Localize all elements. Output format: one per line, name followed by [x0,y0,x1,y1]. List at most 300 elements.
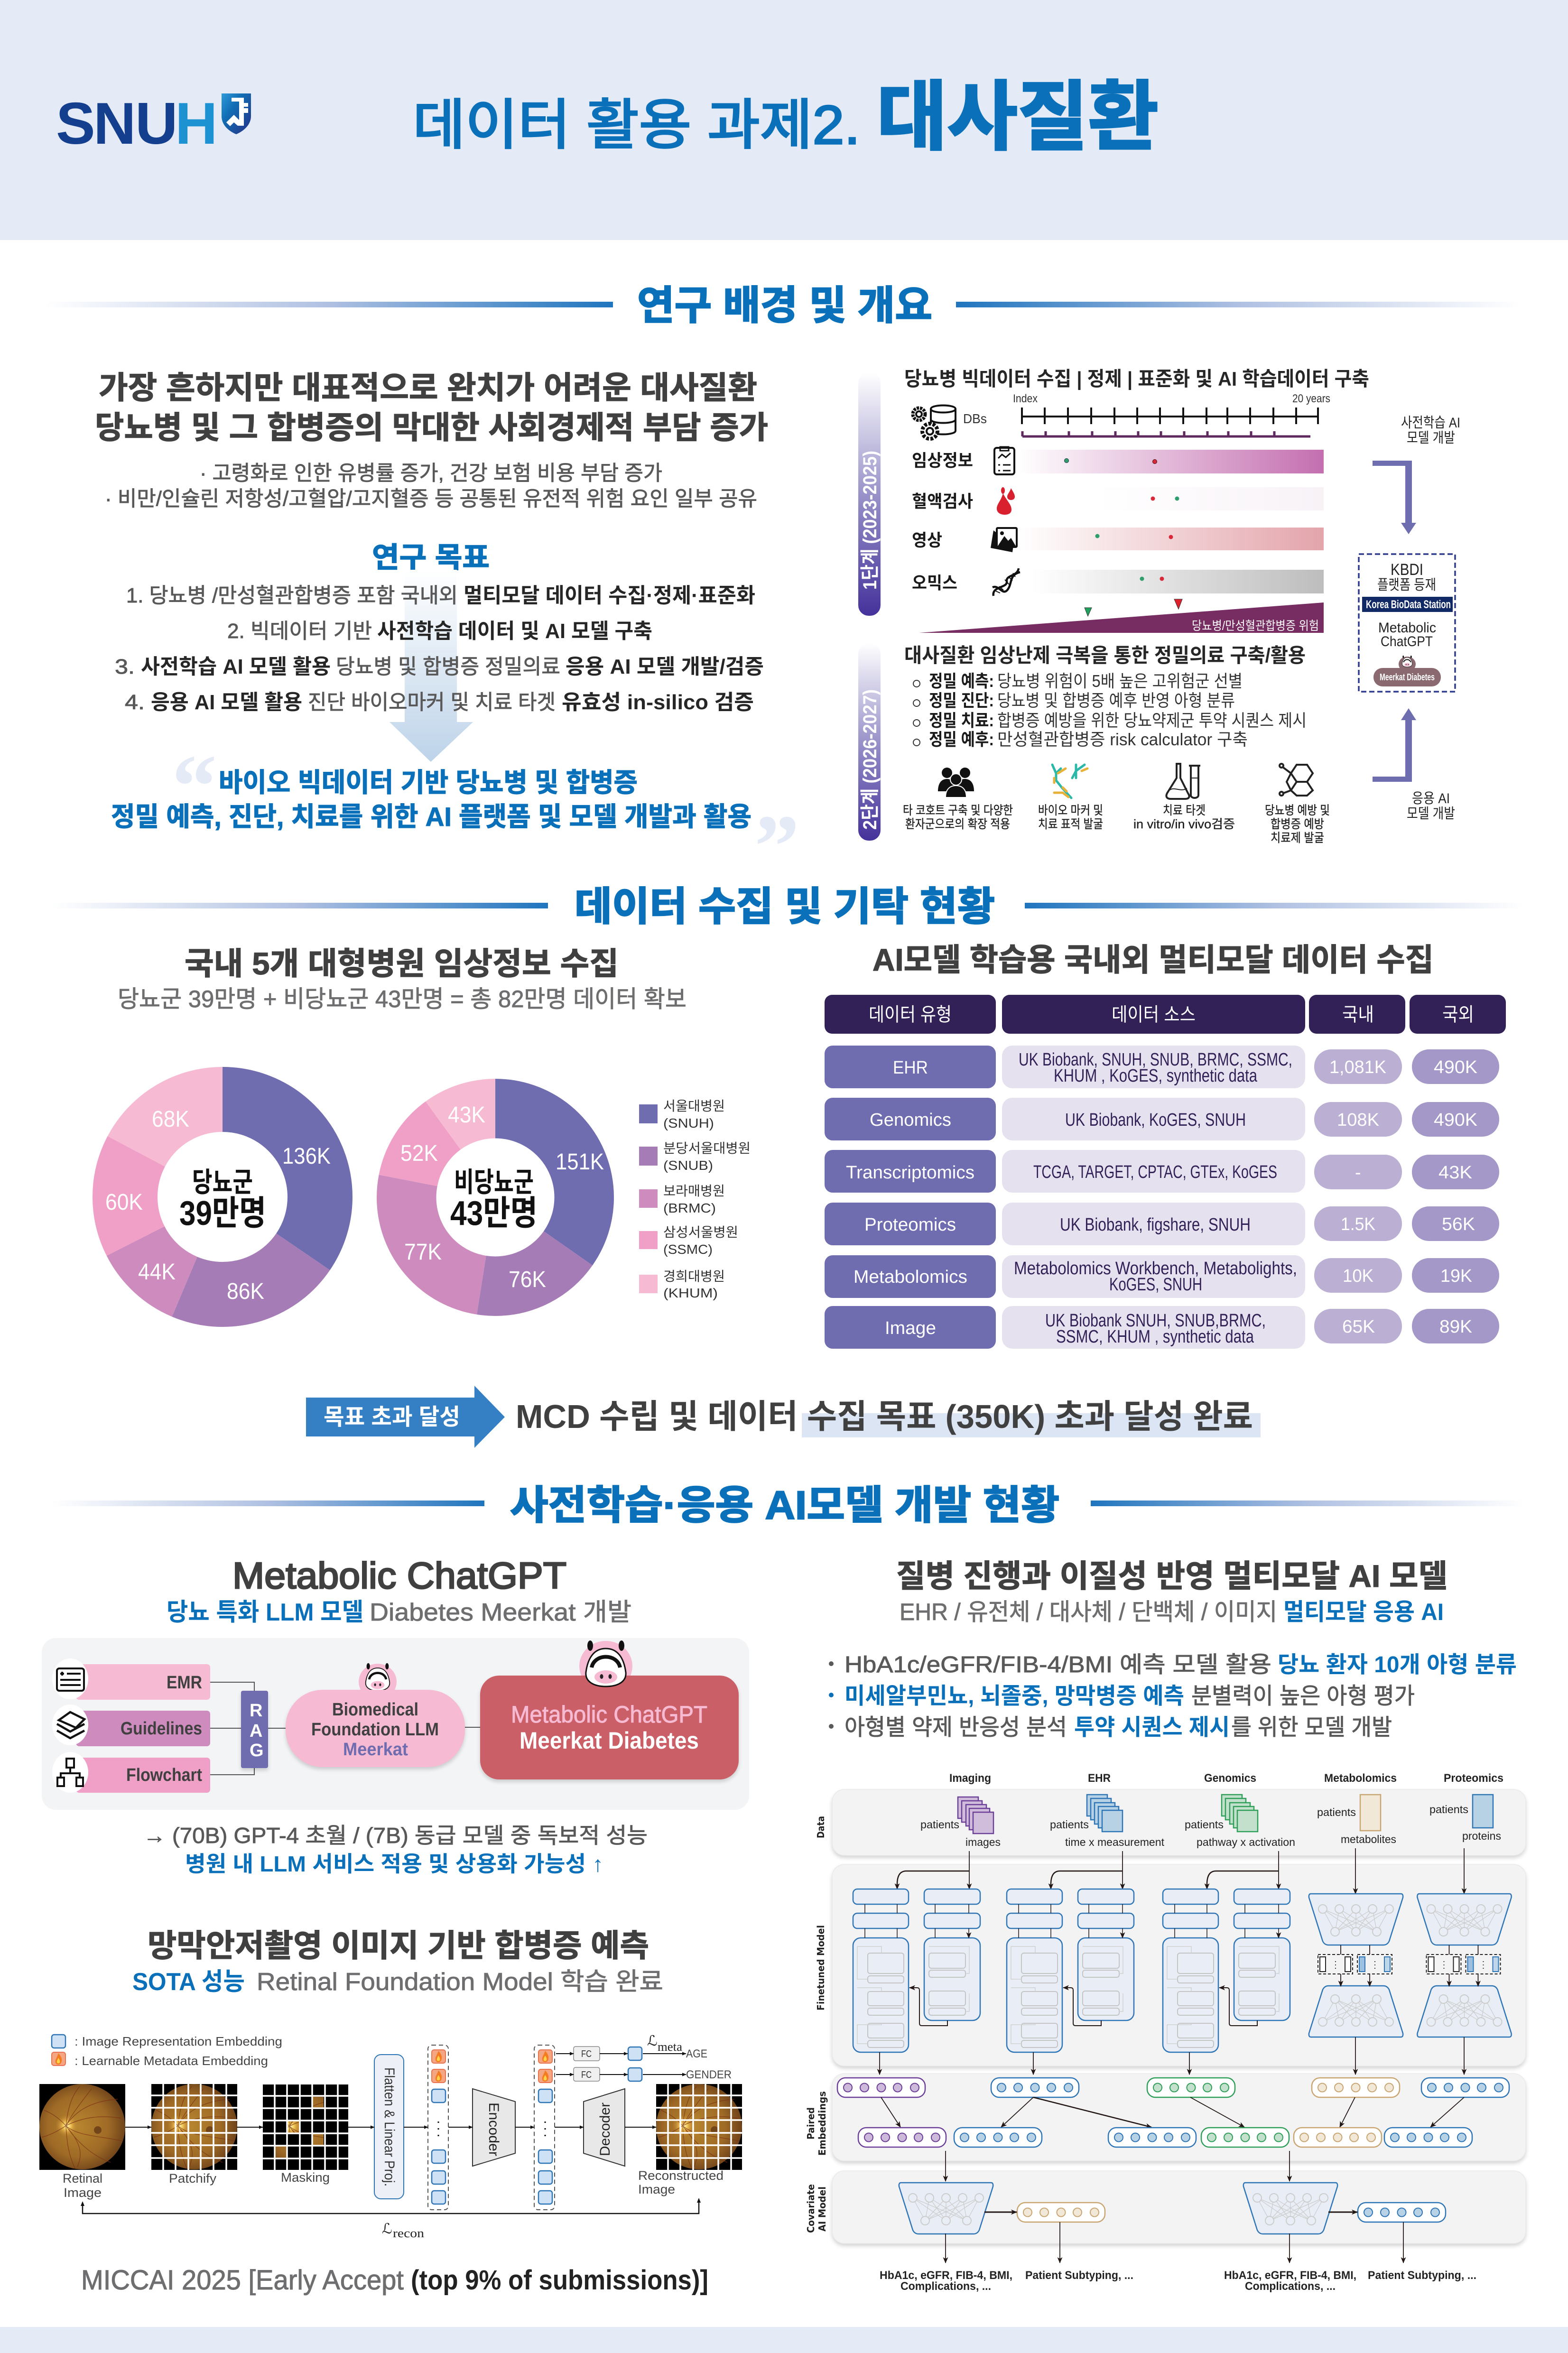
text block: precision medicine list: 만성혈관합병증 risk calculator 구축 [997,730,1248,749]
row: Image: UK Biobank SNUH, SNUB,BRMC, [1045,1311,1266,1331]
text block: precision medicine list: 정밀 예후: [929,730,994,749]
heading: burden [95,370,768,445]
row: Flowchart [52,1752,210,1793]
image: reconstructed: Reconstructed [638,2168,724,2183]
legend: (BRMC) [663,1201,716,1215]
row: Transcriptomics: Transcriptomics [846,1163,974,1183]
chart: non-diabetic donut: 비당뇨군 [454,1167,534,1198]
text block: MICCAI [81,2265,708,2296]
arrow: down to KBDI [1373,461,1416,534]
text block: goals: 응용 AI 모델 활용 [151,691,302,714]
text block: precision medicine list: 정밀 진단: [929,691,994,710]
text block: bullets [829,1652,1517,1740]
logo: SNUH: S [56,91,95,157]
metadata heads: GENDER [686,2068,732,2081]
text block: bullets: 투약 시퀀스 제시 [1074,1715,1230,1740]
table header [825,995,1506,1034]
text block: goals: 멀티모달 데이터 수집·정제·표준화 [464,584,755,607]
captions: 당뇨병 예방 및 [1265,803,1330,817]
chart: diabetic donut: 60K [105,1190,143,1215]
heading: 망막안저촬영 이미지 기반 합병증 예측 [148,1928,649,1963]
row: Proteomics: UK Biobank, figshare, SNUH [1060,1215,1251,1235]
text block: bullets: 당뇨 환자 10개 아형 분류 [1278,1652,1517,1677]
side labels: AI Model [816,2186,828,2232]
heading: research goal: 연구 목표 [372,542,490,574]
text block: goals: 사전학습 AI 모델 활용 [141,655,331,678]
image: retinal [39,2084,125,2200]
side labels: Finetuned Model [815,1925,826,2010]
image: patchify: Patchify [169,2171,217,2186]
decoder: Decoder [597,2103,613,2156]
phase bar 1: 1단계 (2023-2025) [860,451,881,590]
panel: background text [95,370,799,897]
side labels: Embeddings [816,2091,828,2156]
logo: SNUH: H [175,91,218,157]
row: Guidelines: Guidelines [121,1719,202,1739]
box: flatten [374,2055,404,2199]
legend: 경희대병원 [663,1269,725,1284]
box: Biomedical Foundation LLM: Meerkat [343,1740,408,1760]
heading: step 1: 당뇨병 빅데이터 수집 | 정제 | 표준화 및 AI 학습데이터 구축 [904,368,1369,390]
box: Metabolic ChatGPT Meerkat Diabetes [480,1676,739,1779]
subtitle: 당뇨군 39만명 + 비당뇨군 43만명 = 총 82만명 데이터 확보 [118,986,687,1012]
timeline [1013,392,1330,436]
box: RAG [241,1691,268,1768]
text block: MICCAI: (top 9% of submissions)] [411,2265,708,2296]
text block: goals: 당뇨병 및 합병증 정밀의료 [336,655,560,678]
chart: diabetic donut [105,1100,331,1304]
heading: 질병 진행과 이질성 반영 멀티모달 AI 모델 [896,1558,1447,1593]
encoder [473,2089,515,2166]
arrow: goal exceeded [306,1386,505,1448]
image: retinal: Retinal [63,2171,102,2186]
subtitle: Diabetes Meerkat 개발 [370,1599,631,1626]
data labels: pathway x activation [1197,1836,1295,1848]
metadata heads: FC [581,2070,592,2080]
row: Image: 89K [1439,1317,1472,1337]
data labels [920,1803,1501,1848]
text block: bullets: 아형별 약제 반응성 분석 [844,1715,1067,1740]
metadata heads [574,2033,732,2081]
row: imaging: 영상 [912,530,942,550]
subtitle: 당뇨 특화 LLM 모델 [167,1599,363,1626]
text block: goals: 진단 바이오마커 및 치료 타겟 [308,691,556,714]
callout: goal statement: 정밀 예측, 진단, 치료를 위한 AI 플랫폼 및 모델 개발과 활용 [111,802,752,832]
panel: roadmap [858,368,1460,845]
row: Genomics: 490K [1434,1110,1477,1130]
text block: performance: 병원 내 LLM 서비스 적용 및 상용화 가능성 ↑ [185,1852,603,1876]
text block: performance: → (70B) GPT-4 초월 / (7B) 동급 모델 중 독보적 성능 [143,1823,648,1848]
row: Metabolomics: KoGES, SNUH [1109,1275,1202,1295]
section heading: 연구 배경 및 개요: 연구 배경 및 개요 [637,283,932,328]
text block: bullets: · 비만/인슐린 저항성/고혈압/고지혈증 등 공통된 유전적 위험 요인 일부 공유 [105,487,757,510]
side labels: Data [815,1816,826,1838]
panel: multimodal AI model [805,1558,1526,2293]
quote marks: ” [754,797,799,897]
column headers: Genomics [1204,1772,1256,1785]
panel: KBDI box: 플랫폼 등재 [1377,577,1436,593]
captions: in vitro/in vivo검증 [1133,817,1235,831]
chart: non-diabetic donut: 43K [448,1102,485,1128]
chart: non-diabetic donut: 52K [400,1141,438,1166]
panel: multimodal data table [825,942,1506,1349]
row: Proteomics: Proteomics [864,1215,956,1235]
text block: goals: 사전학습 데이터 및 AI 모델 구축 [377,620,652,643]
row: Image: Image [885,1318,936,1338]
phase bar 2: 2단계 (2026-2027) [860,689,881,830]
data labels: patients [1185,1818,1224,1831]
captions: 합병증 예방 [1271,817,1324,831]
row: Transcriptomics: 43K [1438,1163,1472,1183]
title: 대사질환 [877,74,1159,159]
chart: diabetic donut: 136K [282,1144,331,1169]
legend: : Learnable Metadata Embedding [74,2054,268,2068]
risk wedge: 당뇨병/만성혈관합병증 위험 [1192,619,1319,633]
tokens column B [534,2045,555,2210]
reconstruction loss loop: recon [393,2226,424,2240]
text block: bullets [105,462,757,510]
chart: non-diabetic donut: 151K [556,1149,604,1175]
legend: 분당서울대병원 [663,1141,751,1156]
chart: non-diabetic donut: 76K [509,1267,546,1292]
side labels [805,1816,828,2233]
data to model arrows [897,1848,1464,1894]
panel: KBDI box: Meerkat Diabetes [1380,672,1435,683]
section heading: 데이터 수집 및 기탁 현황 [52,884,1523,929]
row: Metabolomics: Metabolomics Workbench, Metabolights, [1014,1259,1297,1278]
row: EHR: 1,081K [1329,1057,1386,1077]
row: Proteomics: 1.5K [1341,1214,1375,1234]
phase bar 1 [858,372,881,616]
captions: 바이오 마커 및 [1038,803,1103,817]
legend: (SSMC) [663,1242,713,1257]
row: Transcriptomics: TCGA, TARGET, CPTAC, GTEx, KoGES [1033,1162,1277,1182]
row: EMR [52,1658,210,1700]
captions: 환자군으로의 확장 적용 [905,817,1010,831]
chart: diabetic donut: 39만명 [179,1195,266,1232]
embeddings top row [837,2078,1509,2097]
diagram background [42,1638,749,1810]
subtitle: SOTA 성능 [132,1968,245,1996]
outcome labels: Complications, ... [900,2280,991,2293]
logo: SNUH: U [135,91,178,157]
text block: bullets: 를 위한 모델 개발 [1231,1715,1392,1740]
outcome labels [880,2269,1476,2293]
label: DBs: DBs [963,411,987,426]
label: pretrain model: 모델 개발 [1407,430,1455,446]
row: blood test [912,487,1324,515]
captions: 타 코호트 구축 및 다양한 [903,803,1013,817]
covariate models [899,2151,1446,2263]
legend: (SNUB) [663,1158,713,1173]
encoder: Encoder [486,2103,501,2156]
chart: diabetic donut: 44K [138,1260,176,1285]
legend: 삼성서울병원 [663,1225,738,1240]
row: Proteomics [825,1203,1499,1245]
image: masking [263,2084,349,2185]
table header: 국내 [1342,1004,1374,1025]
label: pretrain model: 사전학습 AI [1401,415,1460,431]
row: Metabolomics [825,1255,1499,1298]
heading: step 2: 대사질환 임상난제 극복을 통한 정밀의료 구축/활용 [904,644,1306,667]
text block: goals [115,584,764,714]
icon: flasks [1166,764,1200,799]
callout: goal statement [111,768,752,832]
legend: 서울대병원 [663,1099,725,1113]
proteomics autoencoder [1417,1894,1512,2037]
box: Metabolic ChatGPT Meerkat Diabetes: Metabolic ChatGPT [511,1701,707,1728]
image: reconstructed [638,2084,742,2196]
text block: bullets: HbA1c/eGFR/FIB-4/BMI 예측 모델 활용 [844,1652,1271,1677]
arrow: down gradient [390,570,473,762]
metadata heads: meta [658,2040,682,2054]
text block: precision medicine list [913,671,1307,749]
column headers: EHR [1088,1772,1111,1785]
row: omics [912,568,1324,596]
timeline: 20 years [1292,392,1330,405]
text block: precision medicine list: 정밀 치료: [929,711,994,730]
panel: Metabolic ChatGPT [42,1555,749,1876]
icon: large meerkat [586,1640,626,1686]
text block: goals: 2. 빅데이터 기반 [227,620,372,643]
column headers [949,1772,1503,1785]
row: Guidelines [52,1705,210,1746]
label: applied model [1407,791,1455,822]
outcome labels: Patient Subtyping, ... [1368,2269,1476,2282]
text block: bullets: 미세알부민뇨, 뇌졸중, 망막병증 예측 [844,1684,1184,1709]
risk wedge [919,599,1324,633]
flow arrows [125,2054,686,2127]
data labels: metabolites [1341,1833,1396,1845]
section heading: 사전학습·응용 AI모델 개발 현황 [52,1483,1523,1528]
legend [639,1099,751,1300]
panel: KBDI box: KBDI [1391,561,1423,579]
row: clinical [912,447,1324,474]
row: clinical: 임상정보 [912,451,973,470]
row: imaging [912,527,1324,552]
box: flatten: Flatten & Linear Proj. [381,2067,397,2186]
captions: 치료 표적 발굴 [1038,817,1103,831]
section heading: 데이터 수집 및 기탁 현황: 데이터 수집 및 기탁 현황 [575,884,995,929]
legend [52,2034,282,2068]
panel: KBDI box [1359,554,1455,692]
text block: goals: 유효성 in-silico 검증 [562,691,754,714]
text block: goals: 4. [125,691,145,714]
outcome labels: Patient Subtyping, ... [1025,2269,1133,2282]
row: Transcriptomics [825,1150,1499,1193]
captions [903,803,1330,845]
legend: (SNUH) [663,1116,714,1130]
row: Image [825,1306,1499,1349]
subtitle: 멀티모달 응용 AI [1283,1599,1444,1625]
subtitle: EHR / 유전체 / 대사체 / 단백체 / 이미지 [900,1599,1277,1625]
data labels: patients [920,1818,959,1831]
chart: non-diabetic donut: 43만명 [450,1195,538,1232]
text block: performance [143,1823,648,1876]
legend: 보라매병원 [663,1184,725,1198]
icon: antibodies [1052,765,1087,798]
chart: non-diabetic donut: 77K [404,1240,442,1265]
heading: Metabolic ChatGPT [232,1555,566,1596]
row: EHR: 490K [1434,1057,1477,1077]
icon: databases with gears [913,405,956,439]
chart: non-diabetic donut [400,1102,604,1292]
outcome labels: Complications, ... [1245,2280,1336,2293]
icon: people [938,768,974,797]
row: Genomics: Genomics [870,1110,951,1130]
embeddings pairing arrows [881,2097,1464,2127]
row: EHR [825,1046,1499,1088]
title: 데이터 활용 과제2. [413,95,860,156]
panel: retinal foundation model [39,1928,742,2296]
model to embedding arrows [880,2037,1464,2075]
icon: small meerkat [359,1663,397,1700]
column headers: Imaging [949,1772,991,1785]
captions: 치료제 발굴 [1271,831,1324,845]
row: Image: 65K [1342,1317,1375,1337]
table header: 국외 [1442,1004,1474,1025]
row: Metabolomics: Metabolomics [854,1267,967,1287]
timeline: Index [1013,392,1038,405]
side labels: Paired [805,2107,816,2140]
title [413,74,1159,159]
data labels: patients [1050,1818,1089,1831]
row: EHR: EHR [893,1058,928,1078]
column headers: Metabolomics [1324,1772,1397,1785]
heading: 국내 5개 대형병원 임상정보 수집 [185,946,619,981]
callout: goal statement: 바이오 빅데이터 기반 당뇨병 및 합병증 [219,768,638,797]
metadata heads: AGE [686,2047,707,2060]
image: retinal: Image [64,2186,102,2200]
text block: goals: 3. [115,655,135,678]
quote marks: “ [172,737,217,836]
data labels: patients [1429,1803,1468,1816]
chart: diabetic donut: 86K [227,1279,264,1304]
row: EHR: UK Biobank, SNUH, SNUB, BRMC, SSMC, [1019,1050,1292,1070]
data labels: proteins [1462,1830,1501,1842]
text block: bullets: 분별력이 높은 아형 평가 [1191,1684,1415,1709]
callout: MCD achievement: MCD 수립 및 데이터 수집 목표 (350K) 초과 달성 완료 [516,1398,1253,1435]
arrow: up to KBDI [1373,708,1416,782]
row: blood test: 혈액검사 [912,491,973,511]
panel backgrounds [832,1789,1526,2243]
label: applied model: 응용 AI [1412,791,1450,806]
panel: KBDI box: Metabolic [1378,620,1436,636]
row: Flowchart: Flowchart [126,1765,202,1785]
decoder [584,2089,625,2166]
table header: 데이터 소스 [1112,1004,1196,1025]
connectors [210,1682,480,1775]
quote marks [172,737,799,897]
header band [0,0,1568,240]
heading: burden: 가장 흔하지만 대표적으로 완치가 어려운 대사질환 [99,370,757,405]
logo: SNUH [56,91,251,157]
captions: 치료 타겟 [1163,803,1206,817]
icon: molecule [1280,764,1313,796]
text block: bullets: · 고령화로 인한 유병률 증가, 건강 보험 비용 부담 증가 [200,462,662,485]
section heading: 연구 배경 및 개요 [45,283,1520,328]
row: Metabolomics: 10K [1343,1266,1373,1286]
box: Biomedical Foundation LLM: Biomedical [332,1700,418,1720]
reconstruction loss loop: ℒ [382,2221,392,2237]
chart: diabetic donut: 68K [152,1107,189,1132]
table header: 데이터 유형 [869,1004,952,1025]
panel: KBDI box: Korea BioData Station [1366,598,1451,611]
legend: (KHUM) [663,1286,718,1300]
embeddings bottom row [858,2128,1472,2147]
row: Metabolomics: 19K [1440,1266,1472,1286]
image: masking: Masking [281,2170,330,2185]
row: Genomics: 108K [1337,1110,1379,1130]
data stacks [958,1795,1493,1834]
row: EHR: KHUM , KoGES, synthetic data [1054,1066,1258,1086]
box: Biomedical Foundation LLM [286,1690,465,1767]
outcome labels: HbA1c, eGFR, FIB-4, BMI, [1224,2269,1356,2282]
logo: SNUH: N [93,91,136,157]
column headers: Proteomics [1444,1772,1503,1785]
footer band [0,2327,1568,2353]
panel: domestic hospitals [105,946,751,1304]
heading: AI모델 학습용 국내외 멀티모달 데이터 수집 [872,942,1434,977]
row: Genomics: UK Biobank, KoGES, SNUH [1065,1110,1246,1130]
box: Metabolic ChatGPT Meerkat Diabetes: Meerkat Diabetes [520,1727,699,1754]
reconstruction loss loop [81,2198,701,2240]
subtitle [167,1599,631,1626]
image: reconstructed: Image [638,2182,675,2196]
text block: precision medicine list: 합병증 예방을 위한 당뇨약제군 투약 시퀀스 제시 [997,711,1307,730]
image: patchify [151,2084,237,2186]
side labels: Covariate [805,2184,816,2233]
arrow: goal exceeded: 목표 초과 달성 [324,1405,460,1430]
finetuned blocks [853,1889,1290,2052]
row: Genomics [825,1098,1499,1140]
subtitle: Retinal Foundation Model 학습 완료 [257,1968,663,1996]
metadata heads: ℒ [647,2033,658,2049]
box: Biomedical Foundation LLM: Foundation LLM [311,1720,439,1740]
row: omics: 오믹스 [912,573,957,593]
data labels: patients [1317,1806,1356,1818]
outcome labels: HbA1c, eGFR, FIB-4, BMI, [880,2269,1012,2282]
text block: precision medicine list: 당뇨병 및 합병증 예후 반영 아형 분류 [997,691,1235,710]
row: Transcriptomics: - [1355,1163,1361,1183]
text block: goals: 응용 AI 모델 개발/검증 [566,655,764,678]
panel: KBDI box: ChatGPT [1381,634,1433,649]
table rows [825,1046,1499,1349]
metadata heads: FC [581,2049,592,2059]
text block: precision medicine list: 당뇨병 위험이 5배 높은 고위험군 선별 [997,671,1243,691]
chart: diabetic donut: 당뇨군 [192,1167,253,1198]
icon: large meerkat ear backing [579,1641,632,1691]
text block: MICCAI: MICCAI 2025 [Early Accept [81,2265,404,2296]
row: Image: SSMC, KHUM , synthetic data [1056,1327,1254,1347]
label: applied model: 모델 개발 [1407,806,1455,822]
box: RAG: G [250,1741,264,1760]
row: Proteomics: 56K [1442,1214,1475,1234]
box: RAG: R [250,1701,262,1721]
tokens column A [428,2045,448,2210]
section heading: 사전학습·응용 AI모델 개발 현황: 사전학습·응용 AI모델 개발 현황 [510,1483,1059,1528]
metabolomics autoencoder [1309,1894,1403,2037]
data labels: time x measurement [1065,1836,1165,1848]
heading: burden: 당뇨병 및 그 합병증의 막대한 사회경제적 부담 증가 [95,410,768,445]
text block: precision medicine list: 정밀 예측: [929,671,994,691]
legend: : Image Representation Embedding [74,2034,282,2048]
box: RAG: A [250,1721,262,1741]
row: EMR: EMR [167,1673,202,1693]
text block: goals: 1. 당뇨병 /만성혈관합병증 포함 국내외 [126,584,458,607]
label: pretrain model [1401,415,1460,446]
data labels: images [965,1836,1001,1848]
